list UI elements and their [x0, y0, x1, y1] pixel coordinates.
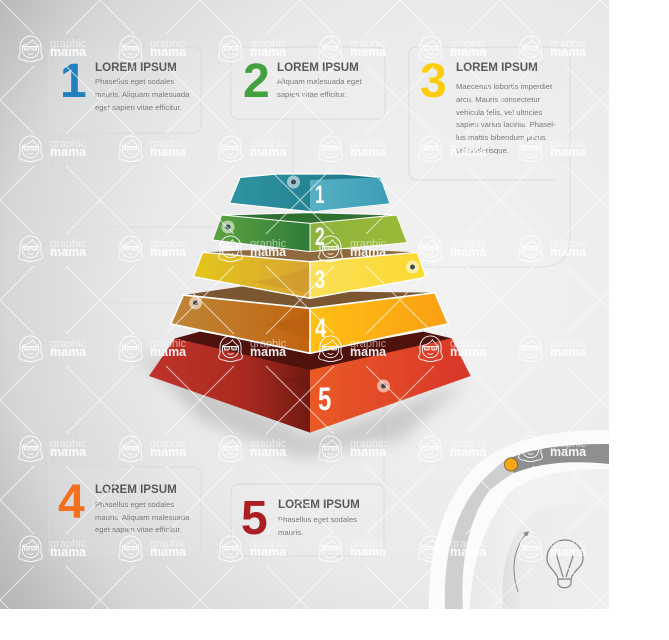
watermark logos: mama [550, 545, 587, 559]
heading 3: LOREM IPSUM [456, 61, 538, 74]
watermark logos: graphic [150, 338, 187, 350]
watermark logos: graphic [450, 438, 487, 450]
watermark logos: mama [550, 145, 587, 159]
watermark logos: graphic [50, 538, 87, 550]
watermark logos: mama [150, 445, 187, 459]
watermark logos: graphic [550, 338, 587, 350]
watermark logos: graphic [350, 38, 387, 50]
watermark logos: graphic [450, 138, 487, 150]
watermark logos: mama [550, 445, 587, 459]
watermark logos: graphic [250, 338, 287, 350]
watermark logos: graphic [350, 438, 387, 450]
inner shaded disc [502, 532, 518, 609]
watermark logos: mama [50, 445, 87, 459]
body 2: Aliquam malesuada eget [277, 77, 362, 86]
watermark logos: graphic [150, 38, 187, 50]
body 1: eget sapien vitae efficitur. [95, 103, 182, 112]
watermark logos: mama [250, 345, 287, 359]
watermark logos: graphic [50, 438, 87, 450]
watermark logos: graphic [550, 138, 587, 150]
watermark logos: graphic [550, 238, 587, 250]
watermark logos: mama [250, 445, 287, 459]
watermark logos: graphic [150, 538, 187, 550]
layer 1 [229, 174, 389, 212]
body 4: mauris. Aliquam malesuada [95, 513, 190, 522]
body 5: mauris. [278, 528, 303, 537]
watermark logos: graphic [250, 238, 287, 250]
layer 5 [149, 332, 471, 433]
card 5 [231, 484, 384, 556]
card 3 [409, 47, 570, 180]
watermark logos [19, 36, 587, 562]
watermark logos: graphic [550, 38, 587, 50]
watermark logos: mama [450, 145, 487, 159]
body 3: sapien varius lacinia. Phasel- [456, 120, 556, 129]
watermark logos: mama [50, 145, 87, 159]
body 3: lus mattis bibendum purus [456, 133, 546, 142]
watermark logos: mama [50, 245, 87, 259]
pyramid chart [130, 174, 471, 458]
watermark logos: graphic [50, 338, 87, 350]
numeral 2: 2 [243, 55, 270, 108]
body 4: eget sapien vitae efficitur. [95, 525, 182, 534]
ring band dark [506, 444, 609, 473]
watermark logos: mama [450, 245, 487, 259]
watermark logos: mama [250, 145, 287, 159]
watermark logos: graphic [150, 138, 187, 150]
icon: light bulb [547, 540, 583, 588]
watermark logos: mama [350, 445, 387, 459]
pyramid numbers [315, 181, 331, 417]
watermark logos: mama [350, 345, 387, 359]
watermark logos: graphic [550, 538, 587, 550]
inner white disc [470, 469, 609, 609]
body 5: Phasellus eget sodales [278, 515, 357, 524]
watermark logos: mama [550, 245, 587, 259]
watermark logos: graphic [50, 38, 87, 50]
body 3: vehicula felis, vel ultricies [456, 108, 542, 117]
watermark logos: mama [150, 45, 187, 59]
watermark logos: graphic [350, 138, 387, 150]
watermark logos: graphic [50, 138, 87, 150]
pyramid shadow [130, 345, 470, 458]
ring band light [445, 456, 520, 609]
watermark logos: mama [150, 245, 187, 259]
pyramid numbers: 5 [318, 381, 331, 417]
watermark logos: graphic [450, 238, 487, 250]
watermark logos: mama [350, 45, 387, 59]
body 1: mauris. Aliquam malesuada [95, 90, 190, 99]
numeral 5: 5 [241, 492, 268, 545]
watermark logos: mama [50, 545, 87, 559]
watermark logos: graphic [250, 38, 287, 50]
watermark logos: graphic [250, 538, 287, 550]
small arc arrow [514, 534, 526, 592]
watermark logos: graphic [150, 438, 187, 450]
heading 2: LOREM IPSUM [277, 61, 359, 74]
bottom-right concentric circle decoration [429, 430, 609, 609]
body 1: Phasellus eget sodales [95, 77, 174, 86]
watermark logos: graphic [450, 38, 487, 50]
pyramid numbers: 2 [315, 222, 325, 251]
card 2 [231, 47, 385, 119]
body 3: Maecenas lobortis imperdiet [456, 82, 553, 91]
watermark logos: mama [250, 45, 287, 59]
watermark logos: mama [250, 545, 287, 559]
pyramid numbers: 1 [315, 181, 325, 209]
watermark logos: mama [250, 245, 287, 259]
watermark logos: graphic [450, 338, 487, 350]
watermark logos: mama [550, 45, 587, 59]
connector frames [49, 47, 570, 484]
body 3: vel scelerisque. [456, 146, 509, 155]
watermark logos: mama [150, 545, 187, 559]
watermark logos: mama [350, 545, 387, 559]
numeral 1: 1 [60, 55, 87, 108]
watermark logos: graphic [450, 538, 487, 550]
card 1 [49, 47, 201, 133]
watermark logos: graphic [250, 138, 287, 150]
watermark logos: graphic [250, 438, 287, 450]
body 2: sapien vitae efficitur. [277, 90, 347, 99]
watermark logos: graphic [50, 238, 87, 250]
heading 1: LOREM IPSUM [95, 61, 177, 74]
body 3: arcu. Mauris consectetur [456, 95, 541, 104]
watermark logos: mama [450, 45, 487, 59]
watermark logos: mama [350, 145, 387, 159]
watermark logos: mama [450, 345, 487, 359]
watermark logos: mama [150, 345, 187, 359]
marker dots [189, 176, 419, 392]
heading 5: LOREM IPSUM [278, 498, 360, 511]
watermark logos: graphic [350, 538, 387, 550]
watermark logos: graphic [550, 438, 587, 450]
watermark logos: mama [450, 445, 487, 459]
heading 4: LOREM IPSUM [95, 483, 177, 496]
watermark logos: graphic [150, 238, 187, 250]
watermark logos: mama [550, 345, 587, 359]
numeral 3: 3 [420, 55, 447, 108]
outer white ring [429, 430, 609, 609]
watermark logos: mama [350, 245, 387, 259]
watermark logos: mama [450, 545, 487, 559]
watermark logos: mama [150, 145, 187, 159]
layer 4 [171, 286, 448, 353]
watermark logos: mama [50, 345, 87, 359]
layer 3 [193, 247, 426, 298]
watermark logos: graphic [350, 338, 387, 350]
orange marker dot [504, 458, 518, 471]
pyramid numbers: 3 [315, 265, 325, 294]
watermark logos: graphic [350, 238, 387, 250]
watermark logos: mama [50, 45, 87, 59]
card 4 [49, 467, 201, 556]
layer 2 [213, 213, 407, 252]
body 4: Phasellus eget sodales [95, 500, 174, 509]
numeral 4: 4 [58, 476, 85, 529]
pyramid numbers: 4 [315, 313, 327, 344]
